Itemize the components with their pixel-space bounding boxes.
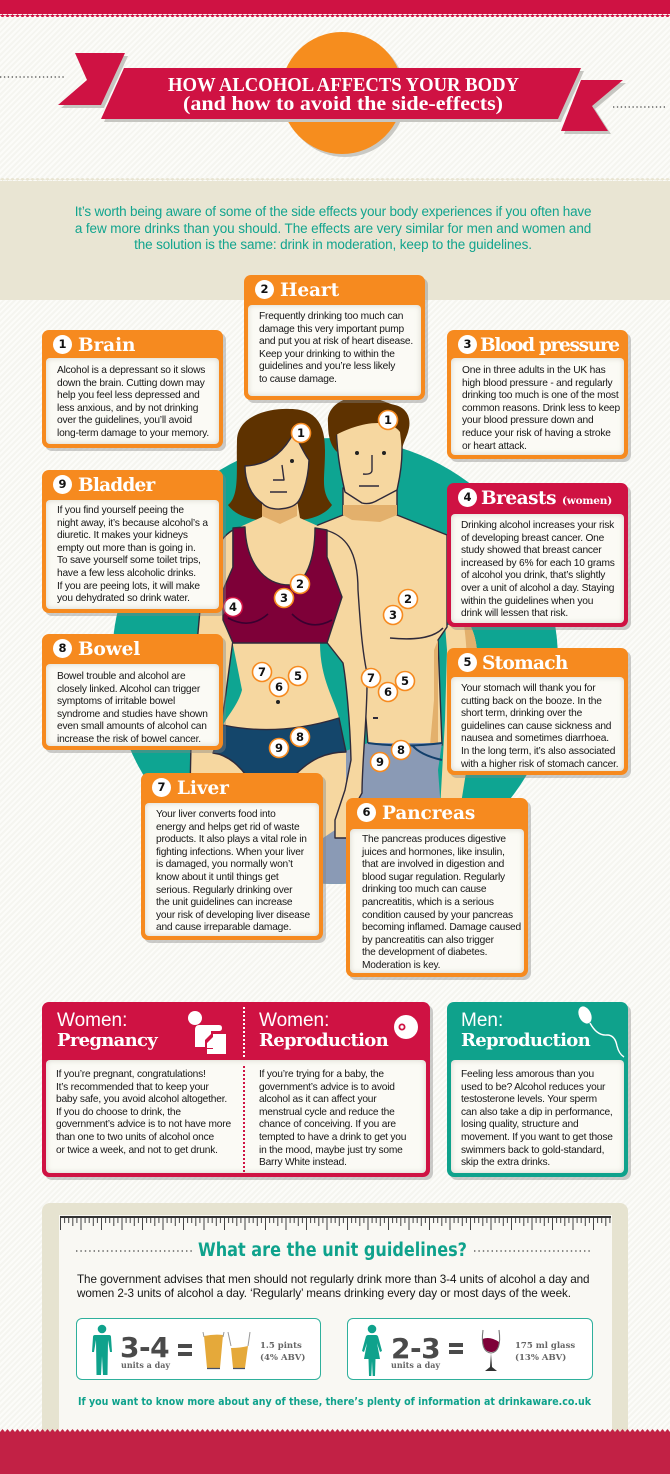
text: men reproduction advice: Feeling less amorous than you	[461, 1069, 594, 1080]
panel: Blood pressure: One in three adults in the UK has	[462, 365, 605, 376]
panel: Pancreas	[346, 798, 528, 977]
panel: Liver: Liver	[177, 778, 229, 799]
panel: Stomach: guidelines can cause sickness and	[461, 721, 611, 732]
intro text: the solution is the same: drink in moderation, keep to the guidelines.	[134, 237, 532, 252]
panel: Breasts: Breasts (women)	[481, 488, 612, 509]
heading: Women Reproduction	[259, 1010, 388, 1051]
panel: Brain: 1	[58, 337, 66, 351]
panel: Bladder: have a few less alcoholic drinks.	[57, 568, 196, 579]
panel: Pancreas: that are involved in digestion and	[362, 859, 504, 870]
panel: Breasts: of developing breast cancer. One	[461, 533, 604, 544]
panel: Blood pressure: or heart attack.	[462, 441, 527, 452]
panel: Breasts: study showed that breast cancer	[461, 545, 601, 556]
text: reproduction advice: in the mood, maybe just try some	[259, 1145, 403, 1156]
illustration: man and woman body map: 3	[389, 608, 397, 622]
panel: Pancreas: drinking too much can cause	[362, 884, 486, 895]
units: 3-4: 3-4	[120, 1331, 169, 1364]
panel: Heart: and put you at risk of heart disease.	[259, 336, 413, 347]
illustration: man and woman body map: 1	[297, 426, 305, 440]
icon: ovum	[394, 1015, 418, 1039]
panel: Pancreas: Pancreas	[382, 803, 475, 824]
illustration: man and woman body map: 8	[296, 730, 304, 744]
text: pregnancy advice: baby safe, you avoid alcohol altogether.	[56, 1094, 227, 1105]
intro text: It’s worth being aware of some of the side effects your body experiences if you often have	[75, 204, 591, 219]
label: 175 ml glass: (13% ABV)	[515, 1353, 566, 1363]
panel: Bladder: To save yourself some toilet trips,	[57, 555, 201, 566]
panel: Stomach: short term, drinking over the	[461, 708, 582, 719]
title banner: (and how to avoid the side-effects)	[183, 93, 503, 115]
icon: wine glass	[482, 1330, 500, 1371]
panel: Pancreas: The pancreas produces digestive	[362, 834, 506, 845]
panel: Blood pressure: common reasons. Drink less to keep	[462, 403, 620, 414]
panel: Blood pressure: 3	[463, 337, 472, 351]
panel: Bladder: diuretic. It makes your kidneys	[57, 530, 188, 541]
panel: Bowel	[42, 634, 223, 750]
text: men reproduction advice	[461, 1069, 613, 1168]
illustration: man and woman body map: 6	[384, 685, 392, 699]
panel: Bladder: If you find yourself peeing the	[57, 505, 184, 516]
divider: header	[243, 1007, 245, 1057]
illustration: man and woman body map: 1	[384, 413, 392, 427]
panel: Liver: 7	[157, 780, 166, 794]
text: men reproduction advice: can also take a dip in performance,	[461, 1107, 613, 1118]
panel: Bladder: night away, it’s because alcohol’s a	[57, 518, 208, 529]
illustration: man and woman body map: 2	[404, 592, 412, 606]
panel: women units	[347, 1318, 593, 1380]
text: reproduction advice: alcohol as it can affect your	[259, 1094, 376, 1105]
panel: Bowel: Bowel	[78, 639, 140, 660]
units: 2-3: 2-3	[391, 1332, 440, 1365]
panel: Brain: help you feel less depressed and	[57, 390, 200, 401]
panel: Heart: Heart	[280, 280, 339, 301]
heading: Men Reproduction: Men:	[461, 1010, 503, 1031]
footer band	[0, 1429, 670, 1474]
panel: men units	[76, 1318, 321, 1380]
panel: Stomach: In the long term, it’s also associated	[461, 746, 615, 757]
panel: Men reproduction	[447, 1002, 628, 1177]
panel: Women pregnancy and reproduction	[42, 1002, 430, 1177]
panel: Liver: fighting infections. When your liver	[156, 847, 304, 858]
panel: Brain	[42, 330, 223, 448]
text: guideline summary: women 2-3 units of alcohol a day. ‘Regularly’ means drinking every day or most days of the week.	[77, 1287, 571, 1300]
divider: body	[243, 1066, 245, 1172]
label: 1.5 pints: 1.5 pints	[260, 1341, 302, 1351]
panel: Brain: over the guidelines, you’ll avoid	[57, 415, 192, 426]
text: reproduction advice: government’s advice is to avoid	[259, 1082, 395, 1093]
heading: Women Pregnancy: Women:	[57, 1010, 127, 1031]
panel: Stomach: Stomach	[482, 653, 568, 674]
text: men reproduction advice: used to be? Alcohol reduces your	[461, 1082, 605, 1093]
illustration: man and woman body map: 4	[229, 600, 237, 614]
text: men reproduction advice: skip the extra drinks.	[461, 1157, 550, 1168]
title banner	[0, 32, 665, 157]
illustration: man and woman body map: 3	[280, 591, 288, 605]
text: men reproduction advice: swimmers back to gold-standard,	[461, 1145, 604, 1156]
panel: Liver: and cause irreparable damage.	[156, 922, 291, 933]
panel: Pancreas: juices and hormones, like insulin,	[362, 847, 505, 858]
panel: Blood pressure	[447, 330, 628, 459]
panel: Breasts	[447, 483, 628, 627]
panel: Liver: serious. Regularly drinking over	[156, 885, 292, 896]
illustration: man and woman body map: 7	[367, 671, 375, 685]
text: reproduction advice: tempted to have a drink to get you	[259, 1132, 406, 1143]
panel: Brain: less anxious, and by not drinking	[57, 403, 198, 414]
icon: man	[92, 1324, 112, 1375]
panel: Bowel: symptoms of irritable bowel	[57, 696, 175, 707]
panel: Liver: your risk of developing liver disease	[156, 910, 310, 921]
panel: Stomach: with a higher risk of stomach cancer.	[461, 759, 618, 770]
icon: woman	[362, 1324, 382, 1376]
panel: Bladder: If you are peeing lots, it will make	[57, 581, 200, 592]
panel: Brain: Brain	[78, 335, 135, 356]
text: pregnancy advice: or twice a week, and not to get drunk.	[56, 1145, 218, 1156]
panel: Breasts: Drinking alcohol increases your risk	[461, 520, 614, 531]
panel: Bladder: empty out more than is going in.	[57, 543, 196, 554]
panel: Pancreas: blood sugar regulation. Regularly	[362, 872, 505, 883]
panel: Blood pressure: high blood pressure - and regularly	[462, 378, 612, 389]
panel: Liver: is damaged, you normally won’t	[156, 859, 293, 870]
intro text	[75, 204, 591, 252]
panel: Pancreas: by pancreatitis can also trigger	[362, 935, 494, 946]
panel: Stomach	[447, 648, 628, 775]
panel: Liver: know about it until things get	[156, 872, 279, 883]
icon: sperm	[578, 1006, 624, 1058]
text: reproduction advice	[259, 1069, 406, 1168]
panel: Pancreas: condition caused by your pancreas	[362, 910, 513, 921]
illustration: man and woman body map	[114, 400, 558, 884]
panel: Breasts: over a unit of alcohol a day. Staying	[461, 583, 614, 594]
label: 1.5 pints	[260, 1341, 305, 1363]
intro text: a few more drinks than you should. The effects are very similar for men and women and	[75, 221, 591, 236]
panel: Bladder: Bladder	[78, 475, 154, 496]
heading: Men Reproduction: Reproduction	[461, 1030, 590, 1051]
panel: Liver: the unit guidelines can increase	[156, 897, 292, 908]
panel: unit guidelines	[42, 1203, 628, 1443]
panel: Bowel: closely linked. Alcohol can trigger	[57, 684, 200, 695]
panel: Bowel: syndrome and studies have shown	[57, 709, 208, 720]
illustration: man and woman body map: 9	[275, 741, 283, 755]
panel: Pancreas: pancreatitis, which is a serious	[362, 897, 494, 908]
equals sign	[449, 1343, 463, 1354]
panel: Bowel: 8	[58, 641, 66, 655]
equals sign	[178, 1344, 192, 1356]
text: men reproduction advice: losing quality, structure and	[461, 1119, 578, 1130]
panel: Breasts: 4	[463, 490, 472, 504]
label: 175 ml glass: 175 ml glass	[515, 1341, 575, 1351]
panel: Liver: energy and helps get rid of waste	[156, 822, 299, 833]
text: reproduction advice: menstrual cycle and reduce the	[259, 1107, 395, 1118]
heading: What are the unit guidelines: What are the unit guidelines?	[198, 1240, 467, 1261]
panel: Stomach: nausea and sometimes diarrhoea.	[461, 733, 609, 744]
panel: Breasts: of alcohol you drink, that’s slightly	[461, 570, 605, 581]
panel: Bowel: even small amounts of alcohol can	[57, 721, 207, 732]
illustration: man and woman body map: 2	[296, 577, 304, 591]
panel: Pancreas: the development of diabetes.	[362, 947, 487, 958]
heading: Women Pregnancy	[57, 1010, 158, 1051]
panel: Stomach: cutting back on the booze. In the	[461, 696, 602, 707]
panel: Liver	[141, 773, 323, 940]
panel: Heart: Keep your drinking to within the	[259, 349, 395, 360]
label: units a day: units a day	[121, 1360, 170, 1370]
panel: Pancreas: 6	[362, 805, 370, 819]
heading: Women Reproduction: Women:	[259, 1010, 329, 1031]
text: pregnancy advice: If you’re pregnant, congratulations!	[56, 1069, 206, 1080]
panel: Bladder: 9	[58, 477, 66, 491]
text: guideline summary	[77, 1273, 589, 1300]
panel: Breasts: drink will lessen that risk.	[461, 608, 568, 619]
panel: Heart: damage this very important pump	[259, 324, 404, 335]
text: men reproduction advice: movement. If you want to get those	[461, 1132, 613, 1143]
panel: Pancreas: Moderation is key.	[362, 960, 440, 971]
panel: Heart: to cause damage.	[259, 374, 337, 385]
illustration: man and woman body map: 8	[397, 743, 405, 757]
text: reproduction advice: chance of conceiving. If you are	[259, 1119, 396, 1130]
heading: Women Reproduction: Reproduction	[259, 1030, 388, 1051]
panel: Heart	[244, 275, 425, 400]
illustration: man and woman body map: 9	[376, 755, 384, 769]
illustration: man and woman body map: 5	[401, 674, 409, 688]
panel: Blood pressure: Blood pressure	[480, 335, 619, 356]
panel: Brain: Alcohol is a depressant so it slows	[57, 365, 205, 376]
text: reproduction advice: Barry White instead.	[259, 1157, 347, 1168]
title banner: HOW ALCOHOL AFFECTS YOUR BODY	[168, 74, 520, 96]
heading: Men Reproduction	[461, 1010, 590, 1051]
text: men reproduction advice: testosterone levels. Your sperm	[461, 1094, 597, 1105]
panel: Bladder: you dehydrated so drink water.	[57, 593, 190, 604]
illustration: man and woman body map: 7	[258, 665, 266, 679]
label: 1.5 pints: (4% ABV)	[260, 1353, 305, 1363]
icon: pints	[202, 1332, 250, 1370]
text: guideline summary: The government advises that men should not regularly drink more than 3-4 units of alcohol a day and	[77, 1273, 589, 1286]
panel: Brain: down the brain. Cutting down may	[57, 378, 205, 389]
panel: Liver: Your liver converts food into	[156, 809, 276, 820]
illustration: man and woman body map: 6	[275, 680, 283, 694]
panel: Stomach: 5	[463, 655, 472, 669]
label: units a day: units a day	[391, 1360, 440, 1370]
ruler	[60, 1216, 611, 1230]
panel: Brain: long-term damage to your memory.	[57, 428, 209, 439]
panel: Heart: 2	[260, 282, 268, 296]
panel: Blood pressure: reduce your risk of having a stroke	[462, 428, 611, 439]
text: pregnancy advice: than one to two units of alcohol once	[56, 1132, 214, 1143]
illustration: man and woman body map: 5	[294, 669, 302, 683]
panel: Liver: products. It also plays a vital role in	[156, 834, 307, 845]
heading: Women Pregnancy: Pregnancy	[57, 1030, 157, 1051]
text: pregnancy advice	[56, 1069, 231, 1156]
panel: Heart: guidelines and you’re less likely	[259, 361, 395, 372]
panel: Bowel: Bowel trouble and alcohol are	[57, 671, 185, 682]
panel: Blood pressure: your blood pressure down and	[462, 415, 593, 426]
panel: Blood pressure: drinking too much is one of the most	[462, 390, 618, 401]
label: 175 ml glass	[515, 1341, 575, 1363]
panel: Pancreas: becoming inflamed. Damage caused	[362, 922, 521, 933]
text: pregnancy advice: government’s advice is to not have more	[56, 1119, 231, 1130]
icon: pregnancy	[188, 1011, 226, 1054]
panel: Heart: Frequently drinking too much can	[259, 311, 403, 322]
panel: Stomach: Your stomach will thank you for	[461, 683, 595, 694]
panel: Bladder	[42, 470, 223, 613]
text: pregnancy advice: If you do choose to drink, the	[56, 1107, 181, 1118]
text: reproduction advice: If you’re trying for a baby, the	[259, 1069, 384, 1080]
text: pregnancy advice: It’s recommended that to keep your	[56, 1082, 209, 1093]
panel: Breasts: increased by 6% for each 10 grams	[461, 558, 615, 569]
panel: Breasts: within the guidelines when you	[461, 596, 593, 607]
panel: Bowel: increase the risk of bowel cancer.	[57, 734, 201, 745]
